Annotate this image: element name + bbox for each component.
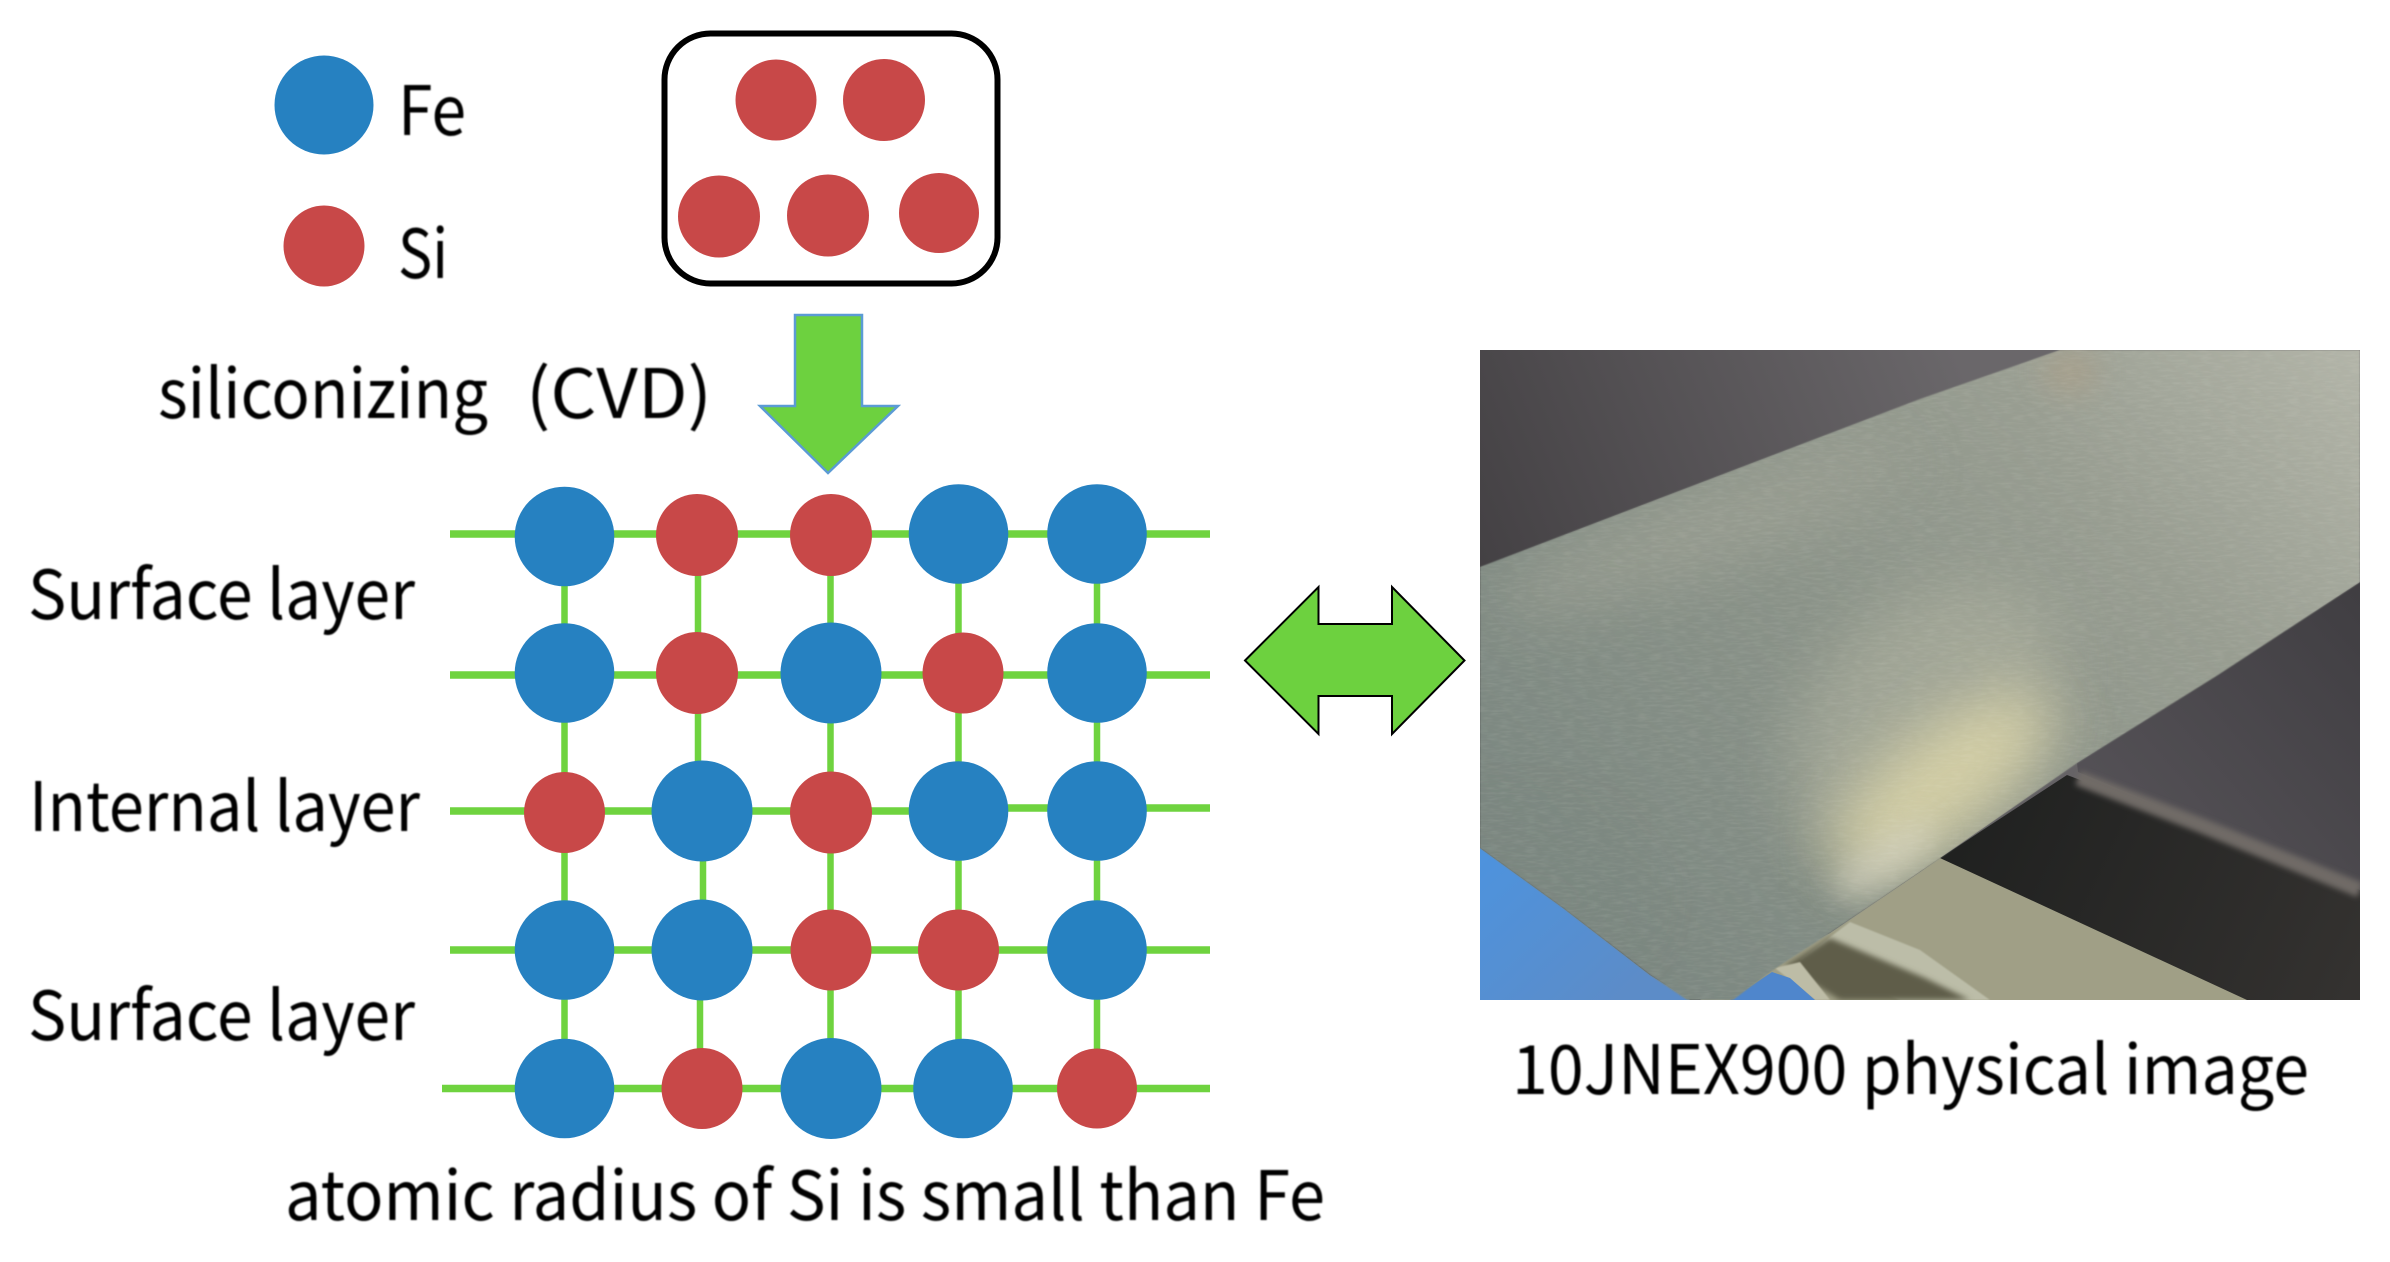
double-headed arrow	[1245, 587, 1464, 734]
photo: dark olive rail band	[1785, 938, 1970, 1000]
row 1 atoms	[515, 484, 1147, 586]
photo: beige rail area	[1700, 858, 2250, 1000]
caption: photo label: 10JNEX900 physical image	[1512, 1015, 2309, 1114]
photo: table edge highlight	[2078, 778, 2360, 890]
legend: Fe atom	[274, 56, 466, 155]
label: bottom surface layer: Surface layer	[28, 961, 416, 1060]
row 5 atoms	[515, 1038, 1137, 1139]
photo: sheet highlights	[1480, 350, 2105, 959]
label: siliconizing (CVD)	[158, 339, 712, 438]
arrow: siliconizing direction	[760, 315, 898, 473]
label: internal layer: Internal layer	[29, 752, 421, 851]
label: siliconizing (CVD): siliconizing	[158, 339, 488, 438]
row 3 atoms	[524, 760, 1147, 862]
caption: atomic radius note: atomic radius of Si is small than Fe	[285, 1141, 1325, 1240]
photo background	[1480, 350, 2360, 1000]
Si atom source box	[664, 34, 998, 284]
photo: pale lower strip	[1775, 962, 1830, 1000]
atomic lattice	[442, 484, 1210, 1139]
photo: blue corner	[1730, 972, 1815, 1000]
photo: pale rail band	[1800, 922, 1990, 1000]
label: top surface layer: Surface layer	[28, 540, 416, 639]
legend: Si atom	[284, 199, 448, 298]
legend: Si atom: Si	[398, 199, 448, 298]
lattice bonds	[442, 534, 1210, 1088]
photo: dark table edge	[1940, 775, 2360, 1000]
label: siliconizing (CVD): (CVD)	[526, 339, 712, 438]
photo: 10JNEX900 sheet	[1480, 350, 2360, 1000]
photo: steel sheet	[1480, 350, 2360, 1000]
row 4 atoms	[515, 900, 1147, 1000]
row 2 atoms	[515, 622, 1147, 724]
photo: dark textured table top	[2077, 582, 2360, 890]
legend: Fe atom: Fe	[398, 56, 466, 155]
photo: blue surface	[1480, 848, 1690, 1000]
legend	[274, 56, 466, 298]
